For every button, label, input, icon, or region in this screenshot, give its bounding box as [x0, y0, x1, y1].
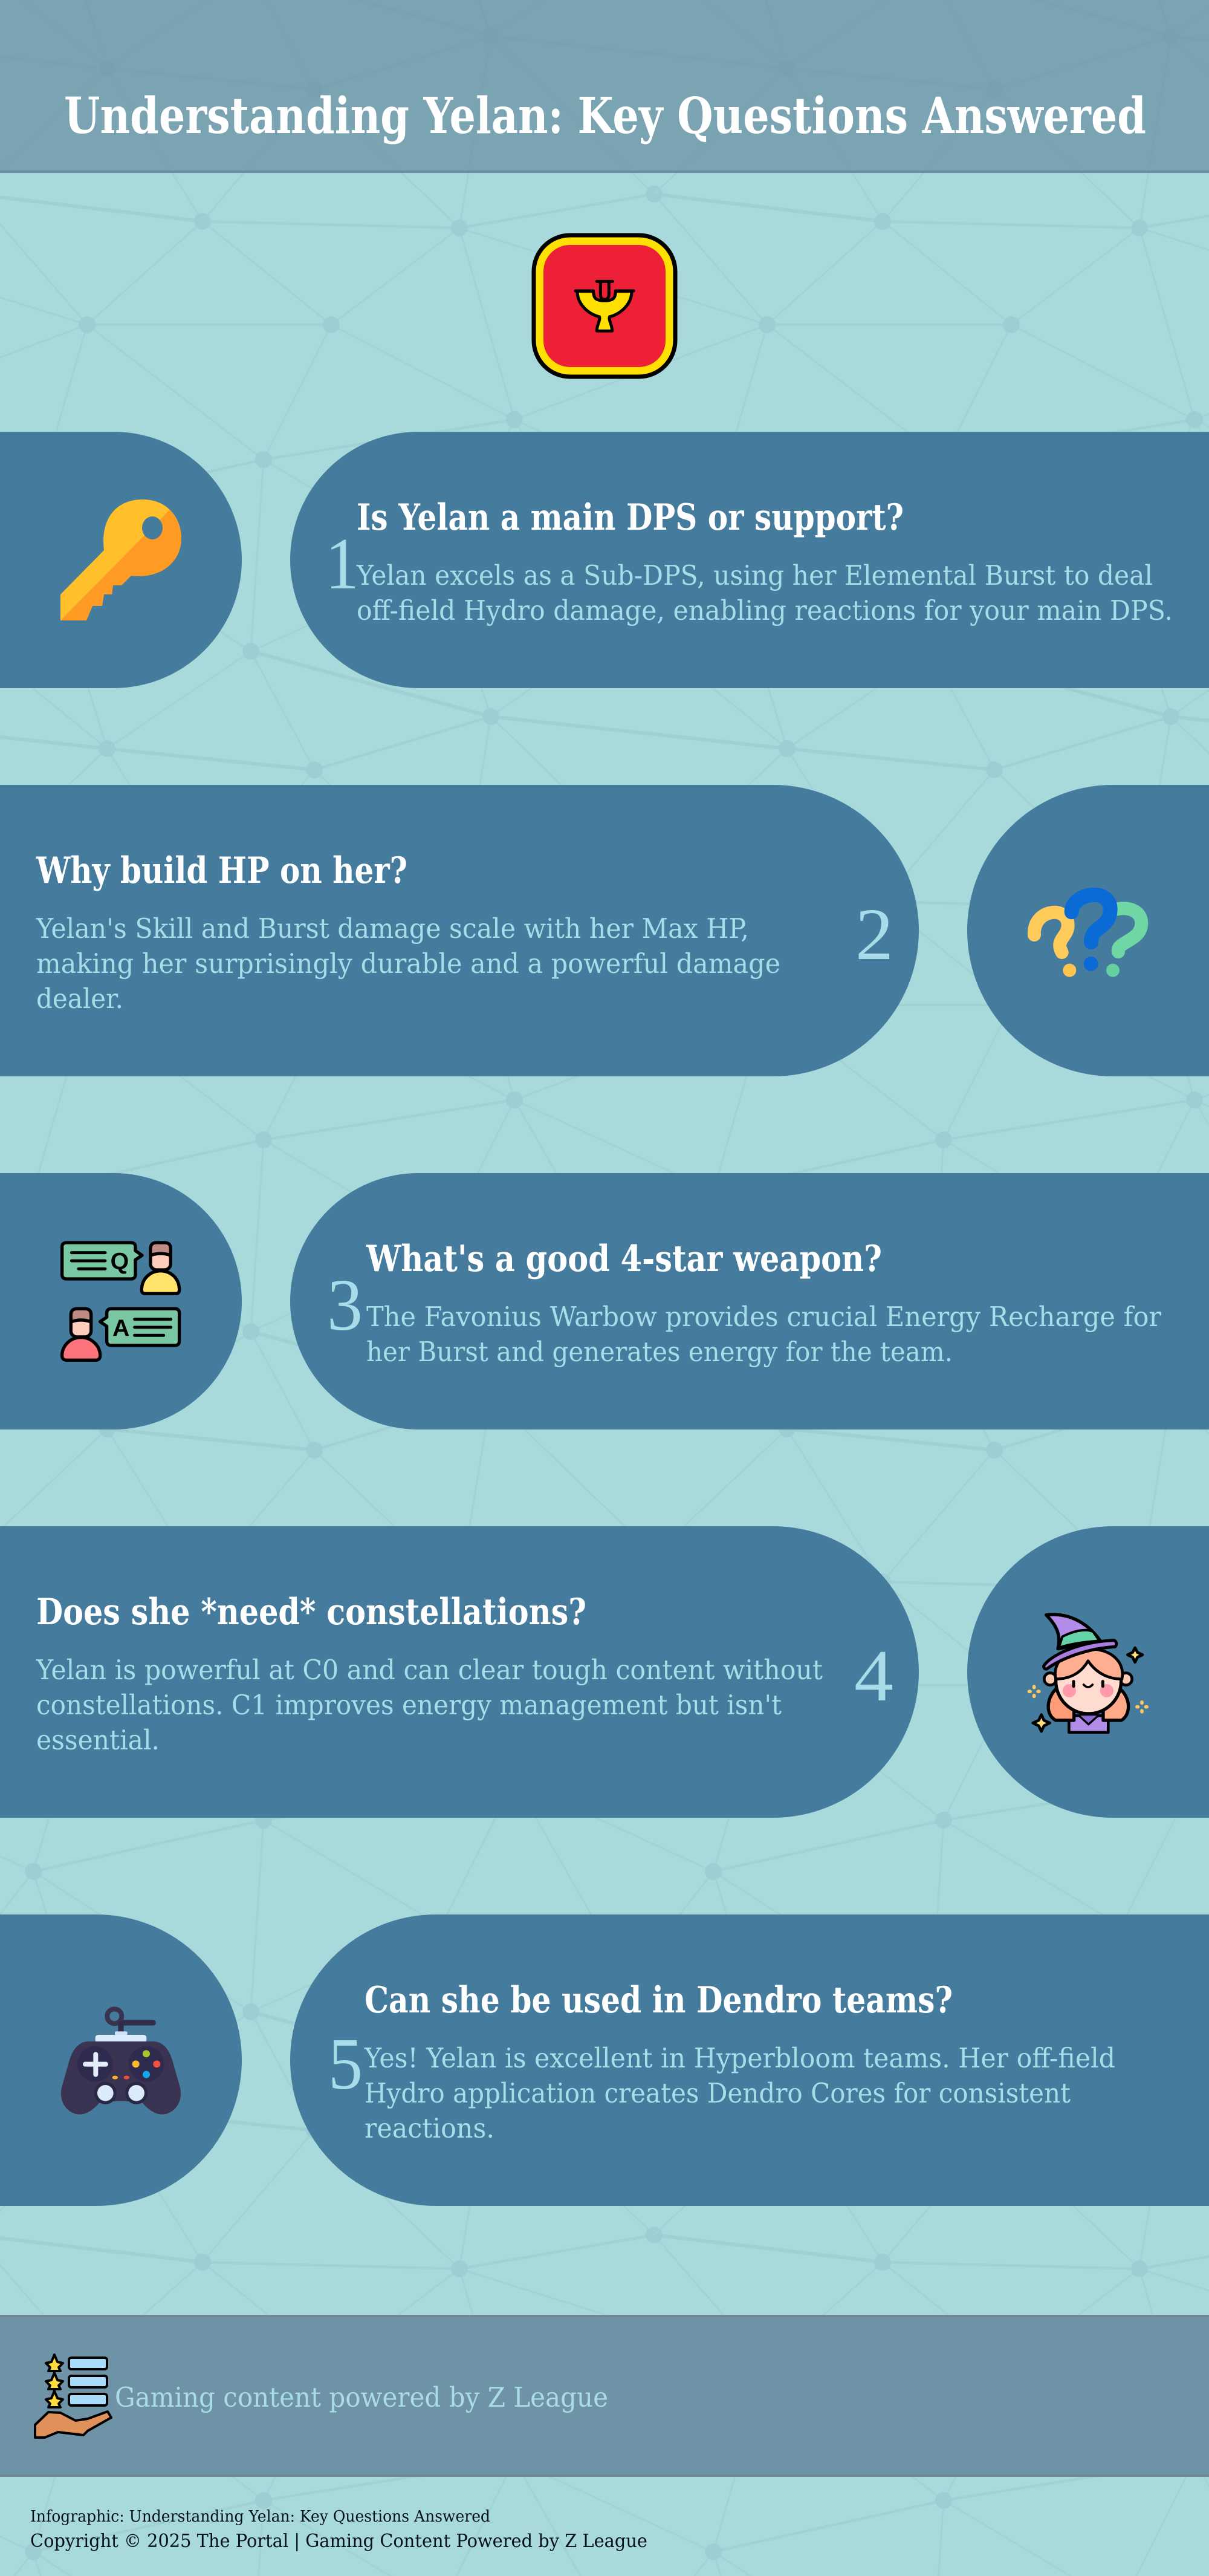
number 1: 1 [325, 523, 359, 605]
body 5: reactions. [365, 2112, 494, 2144]
icon: Q and A chat: A [112, 1315, 129, 1341]
body 4: essential. [36, 1724, 160, 1756]
number 2: 2 [855, 894, 893, 975]
heading 2: Why build HP on her? [36, 850, 407, 892]
row 2: question card [0, 785, 1209, 1076]
body 4 [36, 1654, 823, 1756]
body 3 [366, 1301, 1161, 1368]
heading 1: Is Yelan a main DPS or support? [357, 496, 904, 539]
body 3: The Favonius Warbow provides crucial Energy Recharge for [366, 1301, 1161, 1333]
body 1: Yelan excels as a Sub-DPS, using her Elemental Burst to deal [356, 559, 1153, 591]
body 5 [364, 2042, 1115, 2144]
icon: game controller [61, 2009, 181, 2115]
row 3: question card [0, 1173, 1209, 1429]
icon: Q and A chat: Q [111, 1248, 129, 1275]
body 4: constellations. C1 improves energy management but isn't [36, 1689, 782, 1721]
body 1: off-field Hydro damage, enabling reactions for your main DPS. [357, 594, 1173, 626]
body 3: her Burst and generates energy for the team. [366, 1336, 953, 1368]
body 2: Yelan's Skill and Burst damage scale with her Max HP, [36, 912, 749, 945]
footer band [0, 2315, 1209, 2477]
icon panel 1 [0, 432, 242, 688]
text panel 5 [290, 1914, 1209, 2206]
body 2: dealer. [36, 983, 123, 1015]
body 1 [356, 559, 1173, 626]
icon panel 2 [967, 785, 1209, 1076]
icon: rating list on hand [35, 2355, 111, 2438]
credits: Copyright © 2025 The Portal | Gaming Content Powered by Z League [30, 2531, 647, 2552]
icon: question marks [1034, 895, 1141, 977]
icon: witch girl [1028, 1615, 1149, 1732]
body 2 [36, 912, 780, 1015]
row 1: question card [0, 432, 1209, 688]
header band [0, 0, 1209, 173]
body 5: Yes! Yelan is excellent in Hyperbloom teams. Her off-field [364, 2042, 1115, 2074]
icon panel 4 [967, 1526, 1209, 1818]
icon: key [60, 499, 181, 620]
text panel 2 [0, 785, 919, 1076]
heading 3: What's a good 4-star weapon? [366, 1238, 882, 1280]
text panel 4 [0, 1526, 919, 1818]
row 4: question card [0, 1526, 1209, 1818]
text panel 3 [290, 1173, 1209, 1429]
heading 4: Does she *need* constellations? [36, 1591, 586, 1633]
icon: red and yellow logo badge [534, 235, 675, 377]
credits [30, 2508, 647, 2552]
row 5: question card [0, 1914, 1209, 2206]
number 4: 4 [854, 1635, 893, 1717]
credits: Infographic: Understanding Yelan: Key Questions Answered [30, 2508, 490, 2526]
body 2: making her surprisingly durable and a powerful damage [36, 948, 780, 980]
text panel 1 [290, 432, 1209, 688]
heading 5: Can she be used in Dendro teams? [365, 1979, 953, 2021]
body 4: Yelan is powerful at C0 and can clear tough content without [36, 1654, 823, 1686]
icon panel 3 [0, 1173, 242, 1429]
icon panel 5 [0, 1914, 242, 2206]
footer tagline: Gaming content powered by Z League [115, 2381, 608, 2413]
icon: Q and A chat [62, 1243, 180, 1360]
body 5: Hydro application creates Dendro Cores for consistent [365, 2077, 1071, 2109]
number 5: 5 [328, 2023, 363, 2105]
number 3: 3 [327, 1264, 363, 1346]
